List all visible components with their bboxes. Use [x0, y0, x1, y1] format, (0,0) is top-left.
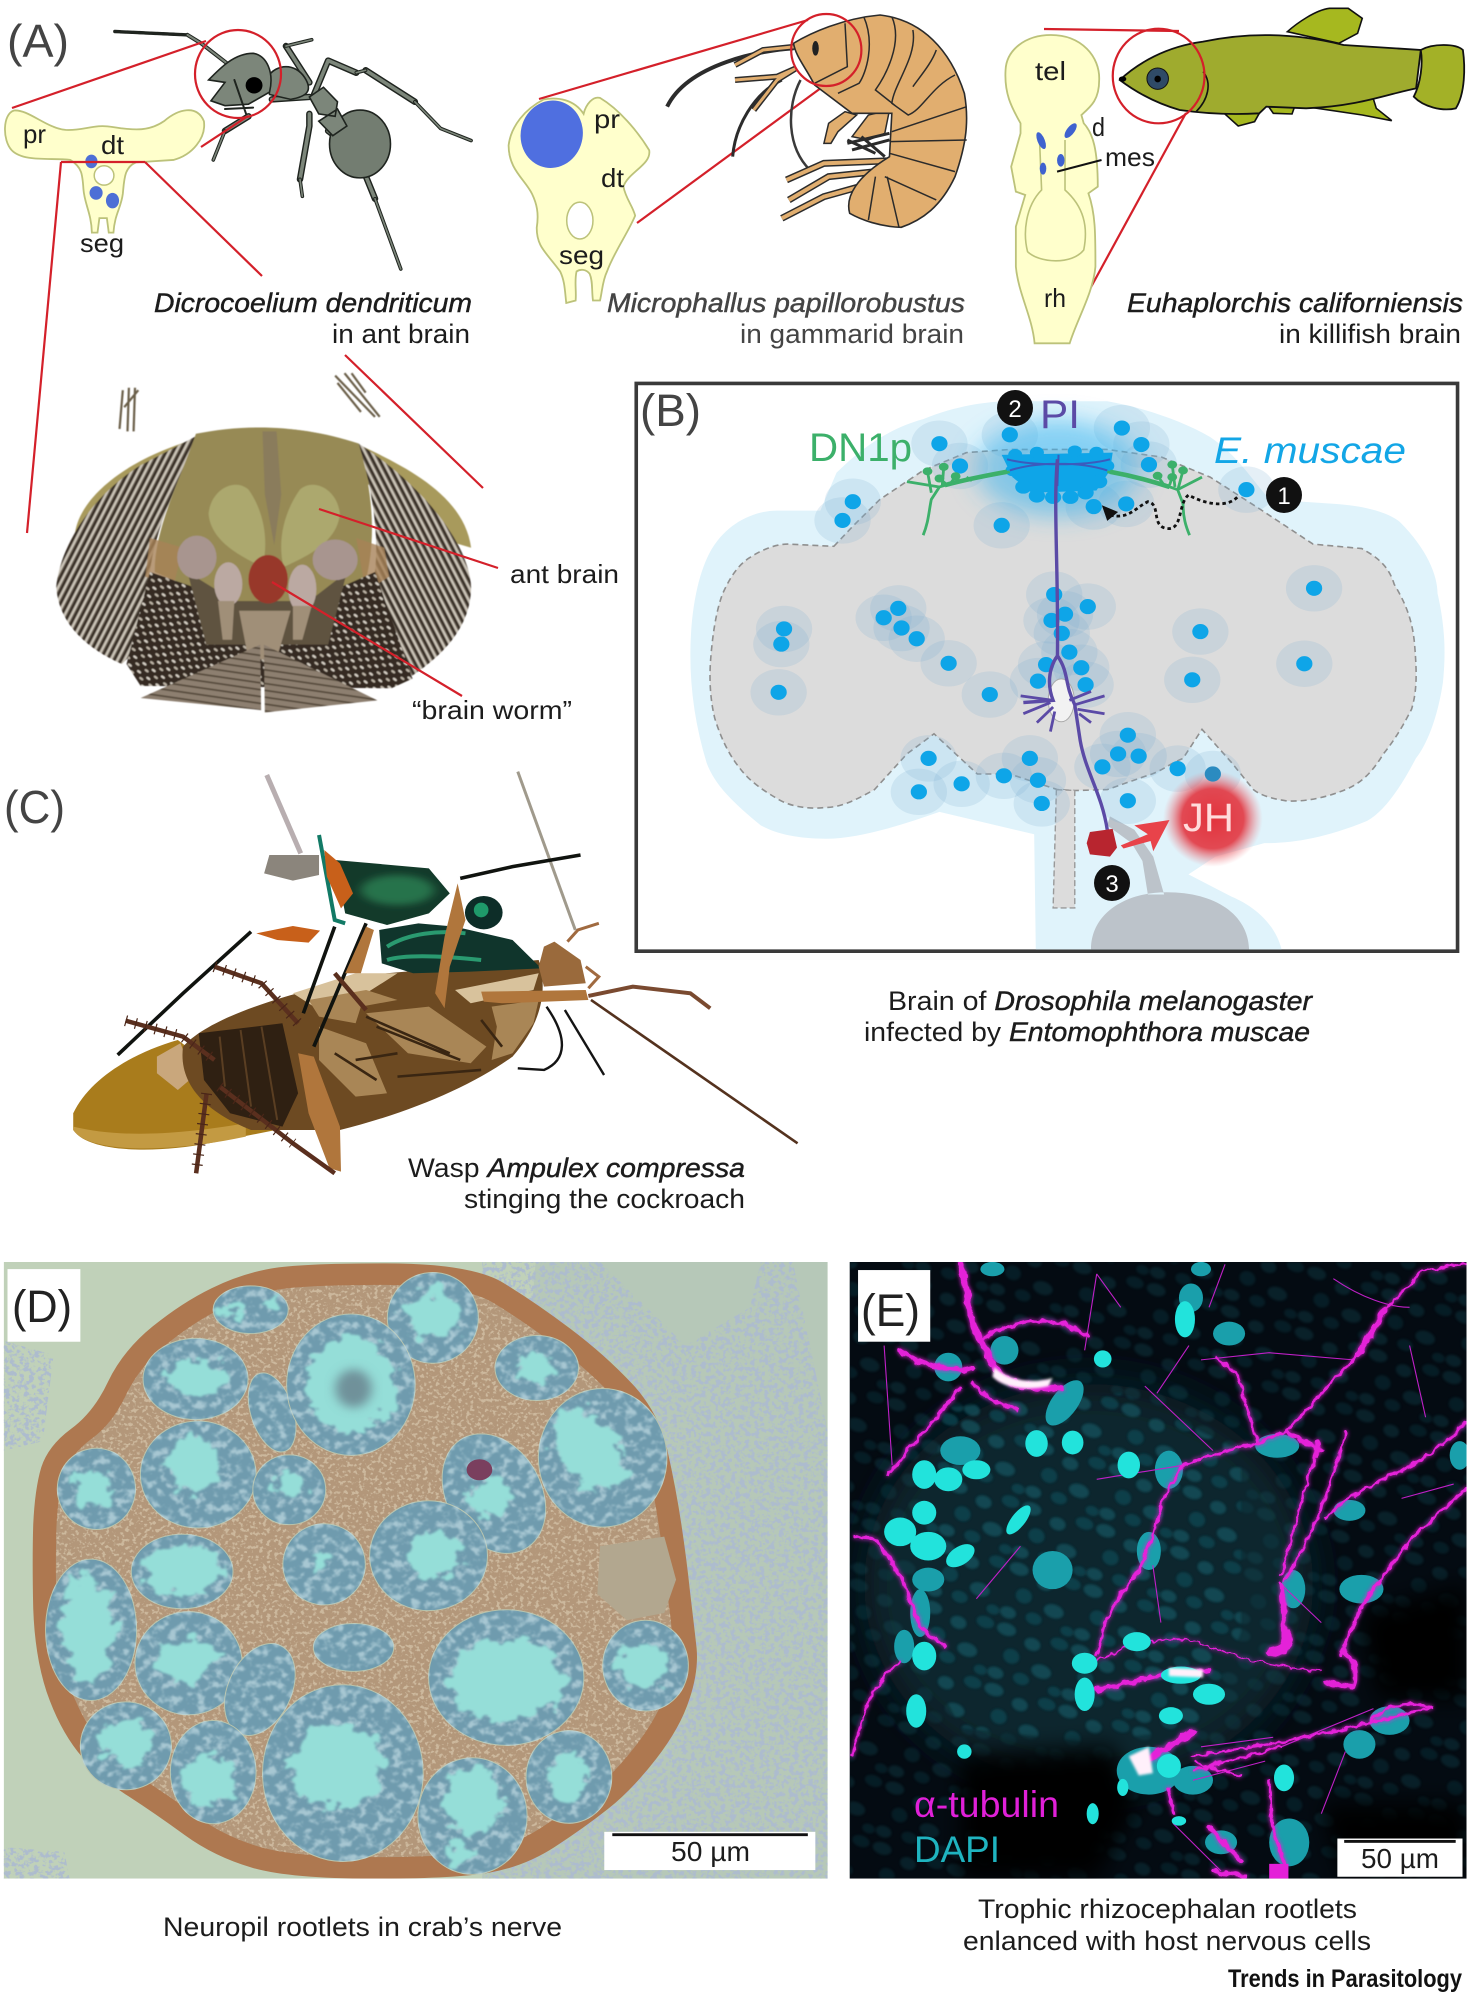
- wasp legs black: [118, 855, 581, 1055]
- JH glow: [1163, 770, 1263, 867]
- diagram labels panel A: [23, 56, 1155, 725]
- thorax sheen: [361, 875, 434, 905]
- panel D label: (D): [12, 1281, 72, 1332]
- leg spines: [126, 967, 298, 1173]
- interior speckle: [56, 1285, 674, 1857]
- diagram labels panel A: seg: [559, 240, 604, 270]
- caption: panel C: [408, 1153, 745, 1214]
- E. muscae label: E. muscae: [1214, 430, 1406, 471]
- cockroach tan legs: [298, 883, 588, 1172]
- label box E: [858, 1270, 930, 1342]
- caption: panel B: infected by Entomophthora muscae: [864, 1017, 1310, 1047]
- pale wing lobe: [157, 1043, 194, 1090]
- front leg tip: [588, 987, 710, 1008]
- diagram labels panel A: d: [1092, 112, 1105, 142]
- cream underside: [293, 973, 539, 1007]
- CT scan: ant head: [56, 373, 471, 713]
- thin magenta fibres: [884, 1264, 1454, 1871]
- wasp head sheen: [474, 903, 488, 917]
- caption: killifish: Euhaplorchis californiensis: [1127, 288, 1463, 318]
- diagram labels panel A: seg: [80, 228, 124, 258]
- panel: ant with brain diagram and CT scan: [5, 32, 649, 713]
- pin 2: [518, 772, 575, 930]
- cockroach head: [539, 942, 586, 987]
- diagram labels panel A: tel: [1035, 56, 1066, 86]
- panel: E micrograph: [850, 1262, 1469, 1879]
- fungal halos: [750, 405, 1342, 827]
- faint nuclei overall: [850, 1262, 1467, 1879]
- nerve interior: [56, 1285, 674, 1857]
- icon: gammarid: [667, 14, 967, 227]
- panel B label: (B): [640, 385, 701, 436]
- antenna brown: [591, 1000, 798, 1143]
- brain diagram: killifish: [1005, 35, 1102, 343]
- step 3 badge: 3: [1105, 871, 1119, 898]
- step 3 badge: [1094, 865, 1130, 901]
- rootlet cores: [62, 1291, 667, 1866]
- wasp wing: [264, 855, 319, 881]
- diagram labels panel A: pr: [594, 104, 620, 134]
- caption: ant: Dicrocoelium dendriticum: [154, 288, 472, 318]
- panel: B frame and fly brain: [636, 383, 1458, 951]
- caption: panel B: Brain of Drosophila melanogaster: [888, 986, 1313, 1016]
- pigment spot: [467, 1459, 492, 1480]
- caption: panel B: [864, 986, 1313, 1047]
- spot over JH: [1205, 766, 1221, 782]
- panel: wasp and cockroach photo: [73, 772, 798, 1173]
- caption: panel C: stinging the cockroach: [464, 1184, 745, 1214]
- caption: panel C: Wasp Ampulex compressa: [408, 1153, 745, 1183]
- caption: panel D: Neuropil rootlets in crab’s nerve: [163, 1912, 562, 1942]
- DN1p neurons: [907, 461, 1202, 535]
- red zoom lines: [12, 20, 1186, 696]
- wing lower shade: [73, 1123, 246, 1148]
- caption: gammarid: [607, 288, 965, 349]
- scale bar line: [612, 1833, 808, 1836]
- crystal body: [597, 1537, 676, 1620]
- wasp abdomen: [379, 923, 541, 973]
- red arrow: [1121, 820, 1170, 851]
- wasp thorax: [335, 860, 450, 925]
- corpora allata: [1087, 829, 1117, 857]
- bright cyan nuclei: [884, 1301, 1294, 1826]
- diagram labels panel A: rh: [1044, 283, 1066, 313]
- brain diagram: gammarid: [509, 91, 649, 303]
- cockroach palps: [567, 923, 599, 988]
- step 2 badge: 2: [1008, 396, 1022, 423]
- DN1p label: DN1p: [809, 426, 912, 470]
- pin 1: [267, 775, 301, 853]
- antennae black: [518, 1007, 604, 1075]
- panel E label: (E): [861, 1285, 920, 1336]
- panel C label: (C): [4, 781, 65, 833]
- corpora cardiaca stem and gut: [1091, 816, 1249, 949]
- dark zones: [960, 1584, 1467, 1879]
- brain diagram: ant: [5, 110, 204, 233]
- caption: ant: [154, 288, 472, 349]
- label box D: [7, 1269, 80, 1342]
- background: [850, 1262, 1467, 1879]
- diagram labels panel A: dt: [601, 163, 625, 193]
- caption: panel E: [963, 1894, 1371, 1956]
- caption: gammarid: in gammarid brain: [740, 319, 964, 349]
- step 1 badge: [1266, 477, 1302, 513]
- icon: ant: [115, 32, 471, 269]
- step 2 badge: [997, 390, 1033, 426]
- tissue tint: [864, 1384, 1313, 1785]
- parasite rootlets: [46, 1272, 688, 1874]
- icon: killifish: [1113, 8, 1464, 126]
- fly brain: [710, 449, 1416, 808]
- caption: killifish: [1127, 288, 1463, 349]
- plate dark marks: [335, 1017, 502, 1080]
- infection halo: [690, 401, 1445, 949]
- panel: D micrograph: [4, 1262, 828, 1879]
- cockroach spiny legs: [126, 967, 366, 1173]
- PI label: PI: [1040, 393, 1080, 437]
- caption: panel E: enlanced with host nervous cells: [963, 1926, 1371, 1956]
- dark abdomen: [199, 1023, 298, 1127]
- panel: gammarid and killifish: [667, 8, 1464, 343]
- orange femora: [256, 850, 353, 943]
- cockroach body: [182, 960, 543, 1130]
- thick magenta rootlets: [852, 1264, 1466, 1876]
- wasp head: [465, 896, 503, 929]
- rootlet mottling: [46, 1272, 688, 1874]
- PI cluster glow: [976, 419, 1139, 517]
- diagram labels panel A: pr: [23, 119, 46, 149]
- frame: [636, 383, 1458, 951]
- diagram labels panel A: dt: [101, 130, 125, 160]
- PI neuron: [1007, 455, 1110, 830]
- pale abdomen plates: [309, 990, 539, 1097]
- abdomen bands: [220, 1027, 277, 1120]
- caption: killifish: in killifish brain: [1279, 319, 1461, 349]
- fibrous tissue tone: [482, 1262, 828, 1879]
- wasp leg green: [319, 835, 345, 923]
- fibrous tissue texture: [4, 1262, 828, 1879]
- caption: gammarid: Microphallus papillorobustus: [607, 288, 965, 318]
- caption: ant: in ant brain: [332, 319, 470, 349]
- rootlet centre: [335, 1369, 372, 1408]
- root block at bottom: [1269, 1864, 1288, 1879]
- esophagus column: [1053, 790, 1075, 908]
- scale bar box E: [1337, 1839, 1463, 1877]
- DAPI legend: DAPI: [914, 1829, 1000, 1870]
- dotted path arrow: [1110, 495, 1237, 529]
- JH label: JH: [1183, 796, 1234, 840]
- nerve cross-section: [33, 1263, 697, 1879]
- abdomen sheen: [387, 932, 481, 960]
- caption: panel E: Trophic rhizocephalan rootlets: [978, 1894, 1357, 1924]
- white oval: [1048, 679, 1074, 722]
- medium nuclei: [894, 1262, 1469, 1866]
- PI cell cluster: [1002, 445, 1114, 504]
- diagram labels panel A: mes: [1105, 142, 1155, 172]
- panel A label: (A): [7, 15, 69, 67]
- scale bar box: [604, 1832, 815, 1870]
- fungal spots: [771, 420, 1322, 811]
- alpha-tubulin legend: α-tubulin: [914, 1784, 1059, 1825]
- scale label E: 50 µm: [1361, 1843, 1439, 1874]
- hot white cores: [992, 1367, 1203, 1775]
- scale bar line E: [1344, 1840, 1456, 1843]
- step 1 badge: 1: [1277, 483, 1291, 510]
- scale label D: 50 µm: [671, 1836, 750, 1867]
- diagram labels panel A: ant brain: [510, 559, 619, 589]
- brighter nuclei central tissue: [912, 1393, 1241, 1742]
- background: [4, 1262, 536, 1878]
- dotted arrow head: [1102, 505, 1118, 521]
- diagram labels panel A: “brain worm”: [412, 695, 572, 725]
- cockroach wing: [73, 1040, 293, 1150]
